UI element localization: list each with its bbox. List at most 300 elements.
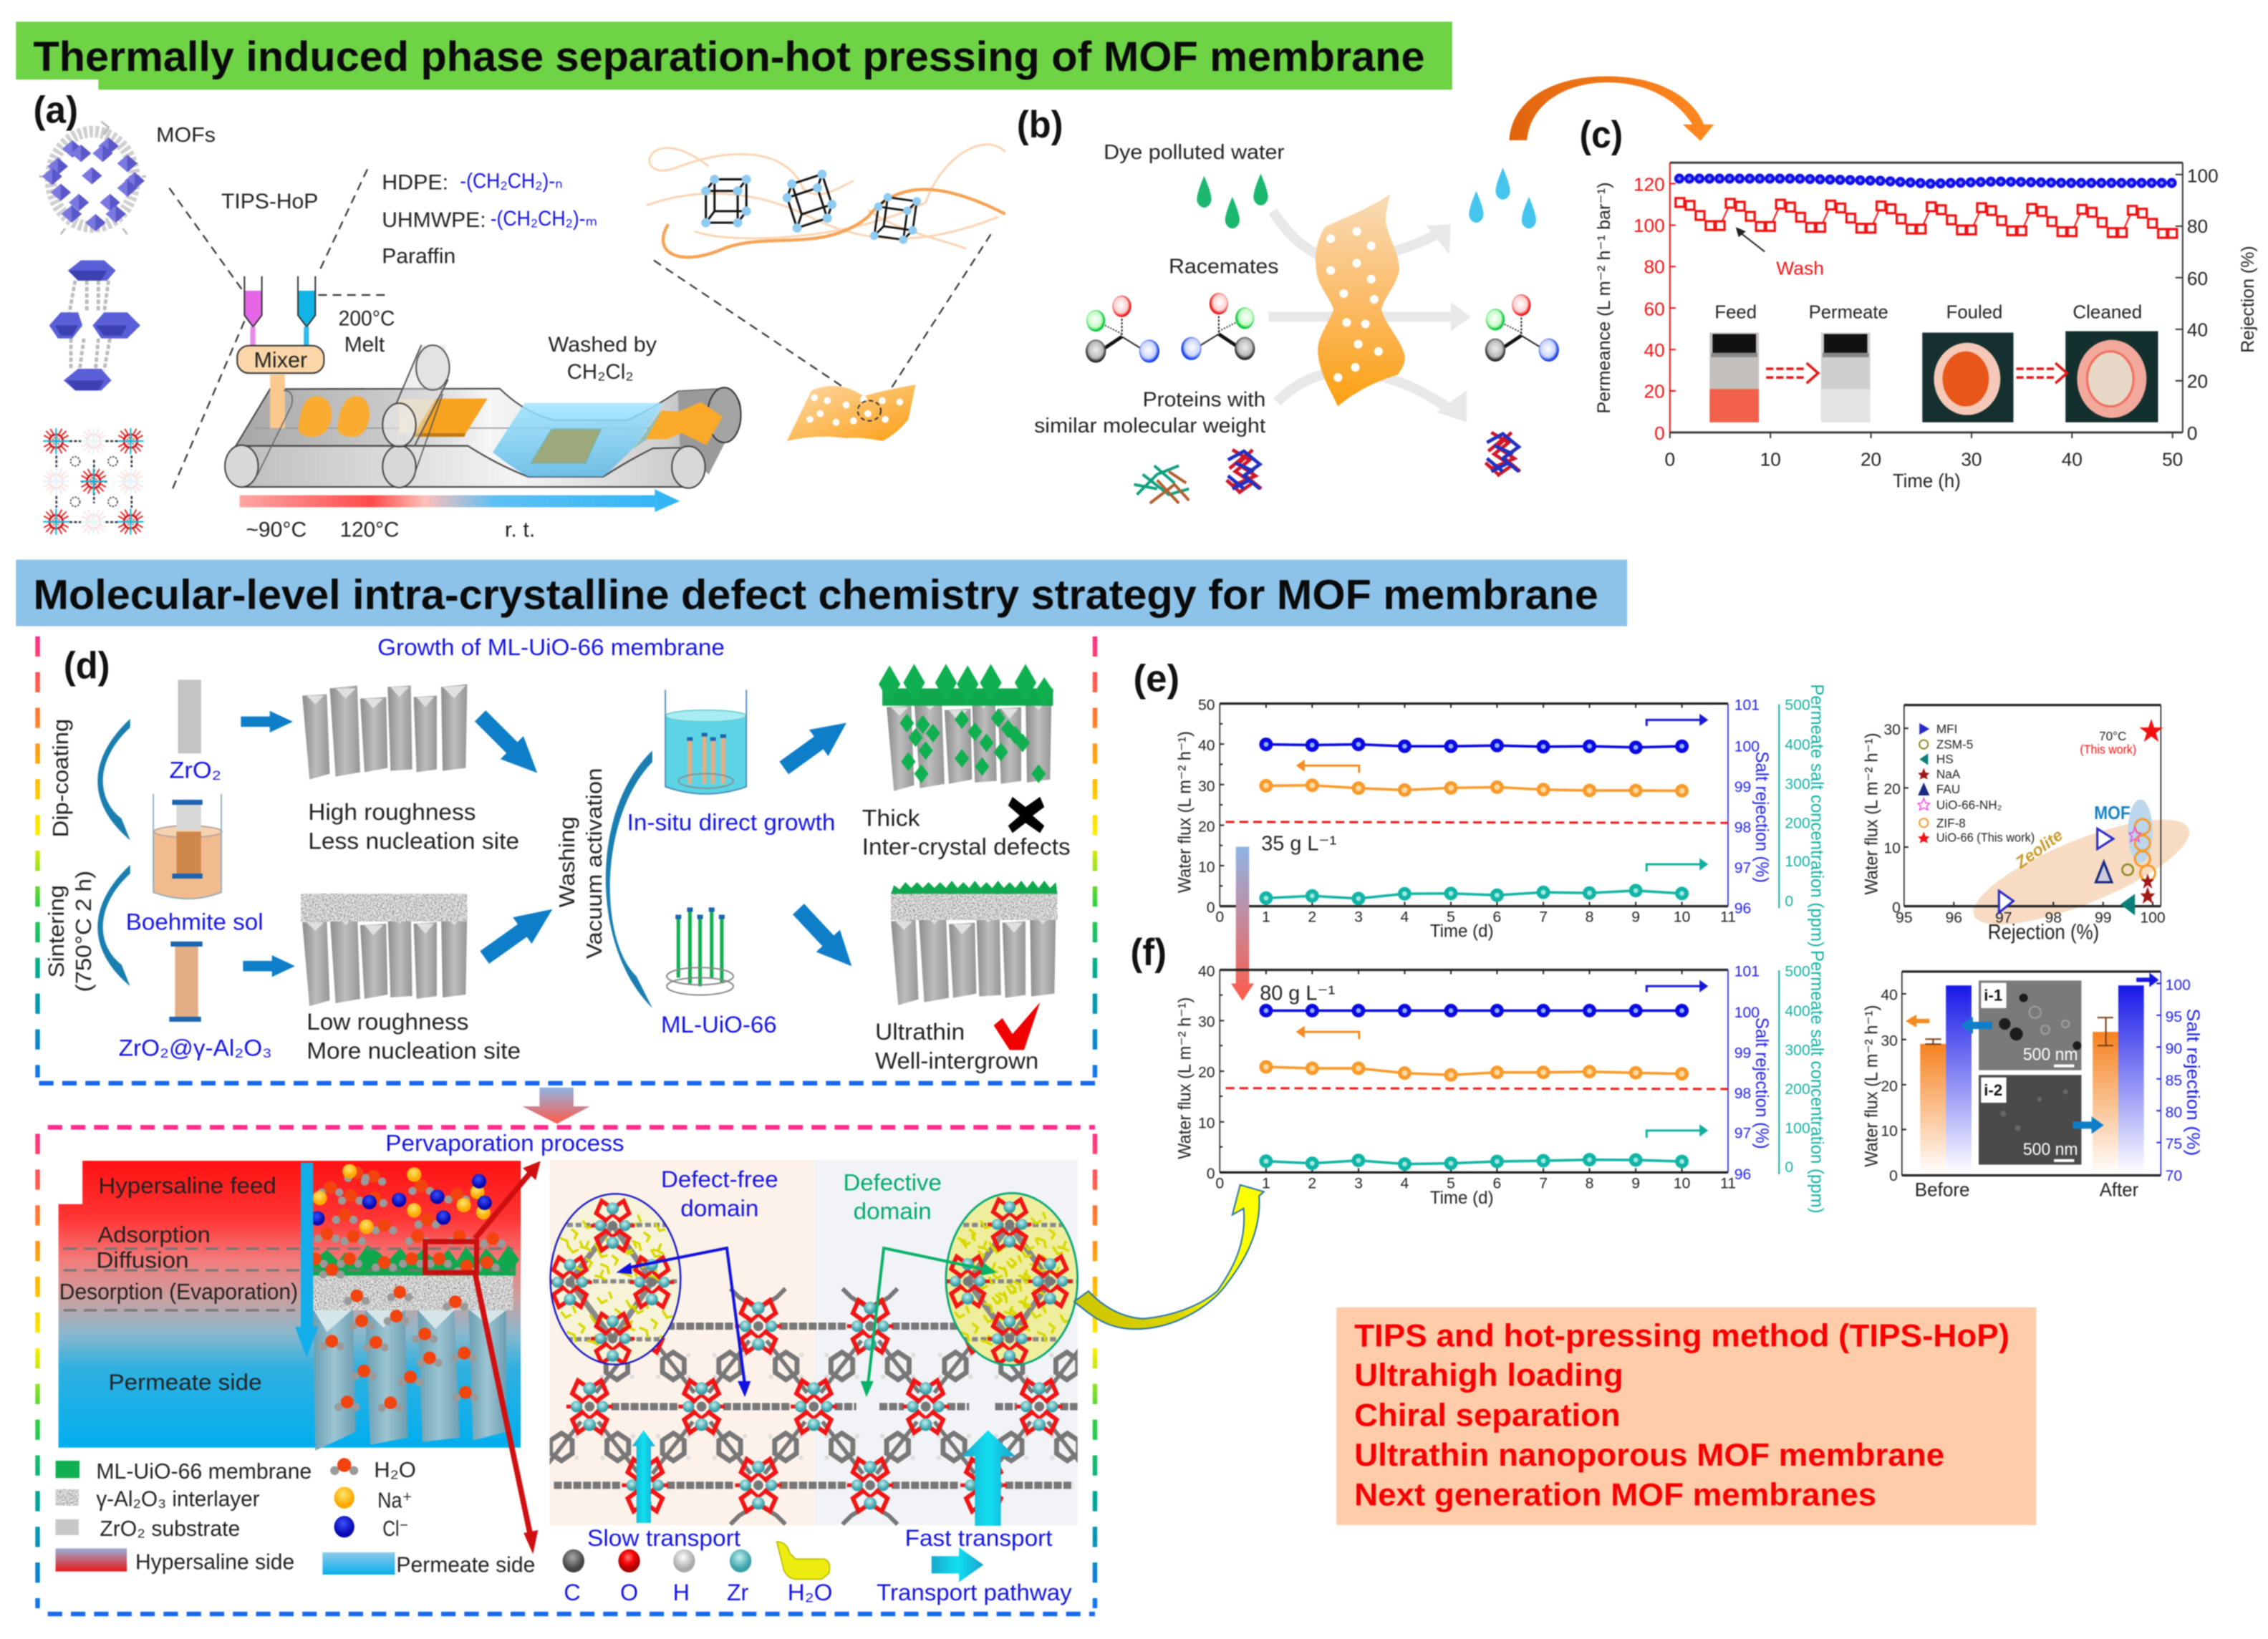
concentration label: 35 g L⁻¹ xyxy=(1261,832,1336,855)
axis titles: Water flux (L m⁻² h⁻¹) xyxy=(1174,997,1195,1159)
left tick labels: 30 xyxy=(1881,1033,1898,1049)
x tick labels: 10 xyxy=(1760,448,1781,470)
axes xyxy=(1902,972,2161,1175)
SEM image i-1: i-1 xyxy=(1984,987,2002,1005)
axes xyxy=(1670,163,2183,438)
atom legend: O xyxy=(620,1580,638,1605)
thick membrane with defects xyxy=(879,664,1053,791)
left tick labels: 10 xyxy=(1881,1123,1898,1140)
left legend: Hypersaline side xyxy=(135,1550,294,1574)
permeate concentration tick labels xyxy=(1785,697,1810,909)
x tick labels: 9 xyxy=(1631,1176,1640,1192)
right tick labels: 90 xyxy=(2166,1040,2182,1057)
left tick labels: 0 xyxy=(1207,899,1215,916)
salt rejection tick labels: 98 xyxy=(1734,819,1751,836)
melt temperature xyxy=(339,306,395,357)
x tick labels: 3 xyxy=(1354,909,1363,926)
x tick labels: 11 xyxy=(1720,909,1736,926)
panel label a: (a) xyxy=(33,90,78,132)
red arrow heads xyxy=(523,1161,541,1554)
data points xyxy=(1999,819,2155,916)
gamma alumina interlayer xyxy=(313,1274,513,1310)
left legend: γ-Al₂O₃ interlayer xyxy=(96,1488,260,1512)
wash annotation xyxy=(1736,227,1824,279)
x tick labels: 2 xyxy=(1308,1176,1316,1192)
domain labels: Defective xyxy=(844,1169,942,1195)
axis titles and categories xyxy=(1862,1005,2203,1200)
dye polluted water label: Dye polluted water xyxy=(1104,140,1285,163)
permeate concentration tick labels xyxy=(1785,963,1810,1176)
this work star xyxy=(2139,719,2163,742)
polymer formula list: -(CH₂CH₂)-ₙ xyxy=(460,170,563,193)
x tick labels: 7 xyxy=(1539,1176,1548,1192)
y tick labels: 10 xyxy=(1883,841,1901,857)
salt rejection tick labels: 97 xyxy=(1734,860,1751,876)
temperature labels: ~90°C xyxy=(246,518,307,541)
cleaned membrane photo xyxy=(2065,332,2158,422)
left tick labels: 60 xyxy=(1644,298,1665,319)
this work annotation xyxy=(2080,729,2136,756)
x tick labels: 2 xyxy=(1308,909,1316,926)
y tick labels: 20 xyxy=(1883,781,1901,798)
temperature gradient arrow xyxy=(240,489,680,512)
zoom dashed guide lines xyxy=(169,169,991,493)
permeate concentration tick labels: 500 xyxy=(1785,697,1810,714)
salt rejection tick labels: 100 xyxy=(1734,1005,1760,1021)
washed by label xyxy=(548,333,657,384)
legend: UiO-66 (This work) xyxy=(1936,831,2035,845)
ultrathin label xyxy=(875,1019,1038,1074)
axis titles xyxy=(1174,684,1827,947)
x tick labels: 95 xyxy=(1896,910,1913,927)
axis titles: Water flux (L m⁻² h⁻¹) xyxy=(1174,731,1195,893)
left tick labels: 0 xyxy=(1207,1166,1215,1182)
salt rejection series xyxy=(1266,745,1682,748)
atom legend: H₂O xyxy=(788,1580,832,1605)
legend: UiO-66-NH₂ xyxy=(1936,798,2002,812)
panel (b): separation applications xyxy=(1017,104,1559,503)
right tick labels xyxy=(2166,977,2191,1184)
panel label f: (f) xyxy=(1130,932,1167,974)
permeate concentration tick labels: 300 xyxy=(1785,1042,1810,1058)
panel (f): 80 g/L stability chart xyxy=(1130,932,1827,1214)
MOF structure: pillared xyxy=(49,261,140,390)
x tick labels: 5 xyxy=(1447,909,1455,926)
blue pointer xyxy=(625,1248,745,1386)
salt rejection tick labels: 97 xyxy=(1734,1126,1751,1142)
transition arrow xyxy=(522,1088,590,1123)
zoom square xyxy=(425,1242,477,1272)
salt rejection tick labels: 96 xyxy=(1734,900,1751,917)
x axis title: Time (h) xyxy=(1893,470,1961,492)
polymer formula list xyxy=(382,170,597,269)
this work annotation: 70°C xyxy=(2099,729,2126,743)
downward flow arrow xyxy=(295,1163,318,1358)
transport labels: Fast transport xyxy=(905,1525,1053,1551)
fast transport arrow xyxy=(962,1431,1015,1526)
rotated washing labels xyxy=(556,768,607,959)
salt rejection tick labels: 99 xyxy=(1734,779,1751,796)
axes xyxy=(1220,704,1779,908)
dashed frame xyxy=(38,1127,1095,1614)
y tick labels: 0 xyxy=(1892,899,1901,916)
x tick labels: 96 xyxy=(1946,910,1962,927)
permeate concentration tick labels: 100 xyxy=(1785,1120,1810,1136)
water flux series xyxy=(1266,785,1682,791)
axis titles: Permeate salt concentration (ppm) xyxy=(1807,684,1827,947)
ML-UiO-66 membrane layer xyxy=(313,1245,519,1275)
left legend: Cl⁻ xyxy=(382,1517,409,1541)
ML-UiO-66 holder xyxy=(667,909,733,995)
low roughness label xyxy=(307,1009,521,1063)
high roughness label xyxy=(308,799,519,854)
legend: FAU xyxy=(1936,782,1960,796)
left tick labels: 10 xyxy=(1198,859,1215,876)
legend xyxy=(1918,722,2035,845)
green pointer xyxy=(868,1248,986,1386)
rotated washing labels: Vacuum activation xyxy=(583,768,607,959)
atom legend: Zr xyxy=(727,1580,749,1605)
callout: key points: Chiral separation xyxy=(1354,1398,1621,1433)
polymer formula list: UHMWPE: xyxy=(382,208,486,232)
left tick labels: 30 xyxy=(1198,778,1215,795)
red zoom arrows xyxy=(475,1172,531,1537)
x tick labels xyxy=(1896,910,2166,927)
salt rejection tick labels: 101 xyxy=(1734,963,1760,980)
atom legend: H xyxy=(673,1580,690,1605)
MOFs label: MOFs xyxy=(156,123,216,146)
axes xyxy=(1220,970,1779,1174)
feed vial photo xyxy=(1709,333,1759,422)
legend: NaA xyxy=(1936,767,1961,781)
polymer formula list: Paraffin xyxy=(382,245,455,269)
left tick labels: 40 xyxy=(1198,963,1215,980)
support top highlights xyxy=(314,1310,506,1332)
domain labels: domain xyxy=(854,1199,932,1224)
callout: key points xyxy=(1336,1307,2036,1525)
dashed red arrows xyxy=(1766,363,2067,383)
water flux series xyxy=(1266,1067,1682,1075)
x tick labels xyxy=(1215,1176,1736,1192)
sodium ions xyxy=(312,1164,491,1234)
x tick labels: 10 xyxy=(1674,909,1690,926)
blue rejection series xyxy=(1679,178,2177,184)
scatter chart: flux versus rejection xyxy=(1862,705,2201,945)
left tick labels xyxy=(1198,697,1215,916)
wavy membrane xyxy=(1316,194,1405,407)
mixer box: Mixer xyxy=(254,349,307,372)
chloride ions xyxy=(310,1174,492,1226)
arrow heads xyxy=(1296,714,1708,871)
right axis title: Rejection (%) xyxy=(2238,246,2258,353)
this work annotation: (This work) xyxy=(2080,742,2136,756)
domain labels: Defect-free xyxy=(661,1166,778,1192)
panel label b: (b) xyxy=(1017,104,1063,146)
x tick labels: 98 xyxy=(2045,910,2062,927)
left tick labels: 80 xyxy=(1644,256,1665,278)
salt concentration series xyxy=(1266,1160,1682,1164)
right tick labels: 95 xyxy=(2166,1009,2182,1025)
boehmite beaker xyxy=(153,794,222,899)
transport labels xyxy=(587,1525,1073,1605)
boehmite sol label: Boehmite sol xyxy=(126,909,264,935)
left tick labels: 30 xyxy=(1198,1014,1215,1030)
left tick labels: 100 xyxy=(1634,215,1665,236)
green pointer heads xyxy=(861,1262,997,1397)
error bars xyxy=(1925,1017,2113,1045)
atom legend xyxy=(563,1542,832,1605)
domain labels xyxy=(661,1166,942,1224)
salt concentration series xyxy=(1266,891,1682,899)
washed by label: CH₂Cl₂ xyxy=(567,360,634,384)
x tick labels: 20 xyxy=(1861,448,1881,470)
temperature labels xyxy=(246,518,535,541)
separated protein xyxy=(1485,432,1520,476)
x tick labels: 0 xyxy=(1665,448,1675,470)
blue pointer heads xyxy=(616,1262,751,1397)
rotated process labels: (750°C 2 h) xyxy=(72,871,96,992)
proteins label: Proteins with xyxy=(1143,388,1265,411)
permeate vial photo xyxy=(1821,333,1871,422)
panel (a): TIPS-HoP process xyxy=(33,90,1005,541)
axis titles: Salt rejection (%) xyxy=(1752,751,1772,883)
left tick labels: 120 xyxy=(1634,174,1665,195)
ultrathin label: Well-intergrown xyxy=(875,1048,1038,1074)
ML-UiO-66 label: ML-UiO-66 xyxy=(661,1012,777,1038)
left tick labels: 20 xyxy=(1198,1065,1215,1081)
salt rejection tick labels: 101 xyxy=(1734,697,1760,714)
polymer chains with MOF cubes xyxy=(647,145,1005,257)
axis titles xyxy=(1174,950,1827,1214)
ZrO2 bar: ZrO₂ xyxy=(169,758,221,783)
photo labels: Fouled xyxy=(1946,301,2002,322)
melt temperature: Melt xyxy=(344,333,385,357)
feed side text: Adsorption xyxy=(97,1222,211,1247)
x tick labels: 97 xyxy=(1995,910,2012,927)
red check mark xyxy=(994,1002,1040,1050)
wash annotation: Wash xyxy=(1776,258,1824,279)
x tick labels xyxy=(1215,909,1736,926)
ZrO2 bar xyxy=(169,680,221,783)
left tick labels: 0 xyxy=(1654,422,1665,444)
left legend: ZrO₂ substrate xyxy=(100,1517,240,1541)
right tick labels: 80 xyxy=(2166,1104,2182,1121)
layer boundary dashes xyxy=(64,1249,513,1310)
MOF label: MOF xyxy=(2094,802,2131,823)
low roughness label: More nucleation site xyxy=(307,1038,521,1063)
axes xyxy=(1904,705,2161,906)
ultrathin membrane xyxy=(891,881,1057,1005)
rotated washing labels: Washing xyxy=(556,816,579,907)
axis titles: Time (d) xyxy=(1430,1188,1494,1208)
feed side text: Desorption (Evaporation) xyxy=(59,1280,298,1305)
axis titles and categories: Water flux (L m⁻² h⁻¹) xyxy=(1862,1005,1882,1167)
feed side text: Hypersaline feed xyxy=(98,1173,276,1198)
rough support pillars xyxy=(302,684,467,780)
x tick labels: 40 xyxy=(2062,448,2083,470)
permeate concentration tick labels: 300 xyxy=(1785,776,1810,793)
x tick labels: 100 xyxy=(2140,910,2166,927)
right tick labels: 100 xyxy=(2187,165,2219,186)
photo labels xyxy=(1714,301,2142,322)
rotated process labels: Dip-coating xyxy=(49,719,73,837)
thick label: Inter-crystal defects xyxy=(862,834,1071,860)
right tick labels: 60 xyxy=(2187,268,2208,289)
salt rejection tick labels: 98 xyxy=(1734,1086,1751,1102)
left legend: H₂O xyxy=(374,1459,416,1482)
left tick labels: 40 xyxy=(1881,987,1898,1004)
photo labels: Cleaned xyxy=(2072,301,2142,322)
permeate concentration tick labels: 100 xyxy=(1785,854,1810,870)
right tick labels: 85 xyxy=(2166,1073,2182,1089)
polymer formula list: -(CH₂CH₂)-ₘ xyxy=(491,207,597,231)
x tick labels: 6 xyxy=(1493,1176,1501,1192)
x tick labels: 10 xyxy=(1674,1176,1690,1192)
left legend xyxy=(56,1458,535,1577)
heading: molecular-level defect chemistry xyxy=(16,560,1627,627)
permeate concentration tick labels: 200 xyxy=(1785,1081,1810,1098)
panel: pervaporation process xyxy=(38,1127,1095,1614)
left tick labels: 0 xyxy=(1889,1168,1898,1184)
feed side text xyxy=(59,1173,298,1395)
salt rejection tick labels xyxy=(1734,963,1760,1183)
thick label: Thick xyxy=(862,805,920,831)
panel label e: (e) xyxy=(1133,657,1179,700)
photo labels: Permeate xyxy=(1809,301,1888,322)
temperature labels: r. t. xyxy=(505,518,535,541)
mixer box xyxy=(237,346,324,373)
permeate concentration tick labels: 400 xyxy=(1785,737,1810,753)
axis titles: Permeate salt concentration (ppm) xyxy=(1807,950,1827,1214)
porous support columns xyxy=(313,1310,506,1451)
x tick labels: 8 xyxy=(1586,1176,1593,1192)
left tick labels: 50 xyxy=(1198,697,1215,714)
axis direction arrows xyxy=(1303,986,1701,1138)
atom legend: C xyxy=(564,1580,581,1605)
panel label d: (d) xyxy=(64,644,110,687)
slow transport arrow xyxy=(632,1431,655,1523)
axis titles xyxy=(1862,733,2099,944)
salt rejection tick labels xyxy=(1734,697,1760,917)
right tick labels: 40 xyxy=(2187,319,2208,341)
callout: key points: Ultrathin nanoporous MOF membrane xyxy=(1354,1438,1944,1473)
protein feed xyxy=(1134,450,1261,503)
MOF structure: ring xyxy=(39,122,146,234)
left legend: ML-UiO-66 membrane xyxy=(96,1460,312,1484)
photo labels: Feed xyxy=(1714,301,1757,322)
callout: key points: Next generation MOF membranes xyxy=(1354,1478,1876,1513)
left legend: Permeate side xyxy=(396,1553,535,1577)
curved orange arrow xyxy=(1509,76,1714,141)
racemates label: Racemates xyxy=(1169,255,1278,278)
X mark xyxy=(1008,797,1044,833)
right tick labels xyxy=(2187,165,2219,444)
zeolite label: Zeolite xyxy=(2011,826,2066,872)
chiral molecules feed xyxy=(1086,293,1255,363)
conveyor belt xyxy=(225,345,741,488)
rotated process labels xyxy=(45,719,96,992)
water molecules xyxy=(302,1166,506,1412)
x tick labels: 5 xyxy=(1447,1176,1455,1192)
permeate concentration tick labels: 400 xyxy=(1785,1003,1810,1020)
panel (e): 35 g/L stability chart xyxy=(1133,657,1827,947)
x tick labels: 1 xyxy=(1262,1176,1270,1192)
orange flux arrow xyxy=(1906,1015,1929,1028)
y tick labels xyxy=(1883,722,1901,916)
heading: thermally induced phase separation xyxy=(16,21,1452,90)
axis titles: Salt rejection (%) xyxy=(1752,1017,1772,1149)
legend: MFI xyxy=(1936,722,1957,736)
salt rejection tick labels: 99 xyxy=(1734,1045,1751,1061)
in-situ label: In-situ direct growth xyxy=(627,809,835,835)
legend: ZIF-8 xyxy=(1936,816,1966,830)
feed side text: Permeate side xyxy=(108,1370,262,1395)
feed to permeate gradient block xyxy=(59,1161,521,1448)
TIPS-HoP label: TIPS-HoP xyxy=(221,190,318,213)
axis titles: Water flux (L m⁻² h⁻¹) xyxy=(1862,733,1882,895)
zeolite region xyxy=(1962,799,2201,945)
right tick labels: 0 xyxy=(2187,422,2198,444)
high roughness label: High roughness xyxy=(308,799,476,825)
left legend: Na⁺ xyxy=(377,1489,412,1513)
domain labels: domain xyxy=(680,1196,758,1222)
bar chart: before and after xyxy=(1862,972,2203,1200)
salt rejection series xyxy=(1266,1010,1682,1011)
axis titles and categories: After xyxy=(2100,1178,2138,1200)
bars xyxy=(1920,985,2144,1174)
axis titles and categories: Salt rejection (%) xyxy=(2183,1008,2203,1156)
x tick labels: 7 xyxy=(1539,909,1548,926)
right tick labels: 100 xyxy=(2166,977,2191,994)
transport legend arrow xyxy=(932,1547,983,1582)
thick label xyxy=(862,805,1071,860)
temperature labels: 120°C xyxy=(340,518,399,541)
salt rejection tick labels: 96 xyxy=(1734,1166,1751,1183)
x tick labels: 3 xyxy=(1354,1176,1363,1192)
blue rejection arrow xyxy=(2136,972,2159,987)
x tick labels: 6 xyxy=(1493,909,1501,926)
concentration change arrow xyxy=(1231,847,1254,1001)
SEM image i-2: i-2 xyxy=(1984,1081,2002,1099)
reference dashed line xyxy=(1226,1088,1728,1089)
x tick labels: 30 xyxy=(1961,448,1982,470)
gray flow arrows xyxy=(1268,211,1458,412)
blue arrow after xyxy=(2072,1116,2104,1133)
x tick labels: 8 xyxy=(1586,909,1593,926)
high roughness label: Less nucleation site xyxy=(308,828,519,854)
x tick labels: 4 xyxy=(1401,1176,1409,1192)
gray arrow heads xyxy=(1426,224,1471,422)
rainbow dashed frame xyxy=(38,637,1095,1083)
MOF lattice xyxy=(541,1289,1089,1524)
reference dashed line xyxy=(1226,822,1728,823)
left tick labels: 20 xyxy=(1644,380,1665,402)
in-situ beaker xyxy=(665,690,746,794)
SEM image i-1: 500 nm xyxy=(2023,1045,2078,1064)
legend: HS xyxy=(1936,752,1954,766)
x tick labels: 0 xyxy=(1215,1176,1224,1192)
panel (c): permeance chart xyxy=(1580,114,2258,492)
axis titles and categories: Before xyxy=(1915,1178,1970,1200)
transport labels: Slow transport xyxy=(587,1525,740,1551)
right tick labels: 70 xyxy=(2166,1168,2182,1184)
panel (d): growth of ML-UiO-66 membrane xyxy=(38,634,1095,1083)
arrow heads xyxy=(1296,980,1708,1137)
fouled membrane photo xyxy=(1922,333,2014,422)
lattice background domains xyxy=(550,1160,1078,1525)
permeate concentration tick labels: 0 xyxy=(1785,1159,1793,1176)
x tick labels: 9 xyxy=(1631,909,1640,926)
